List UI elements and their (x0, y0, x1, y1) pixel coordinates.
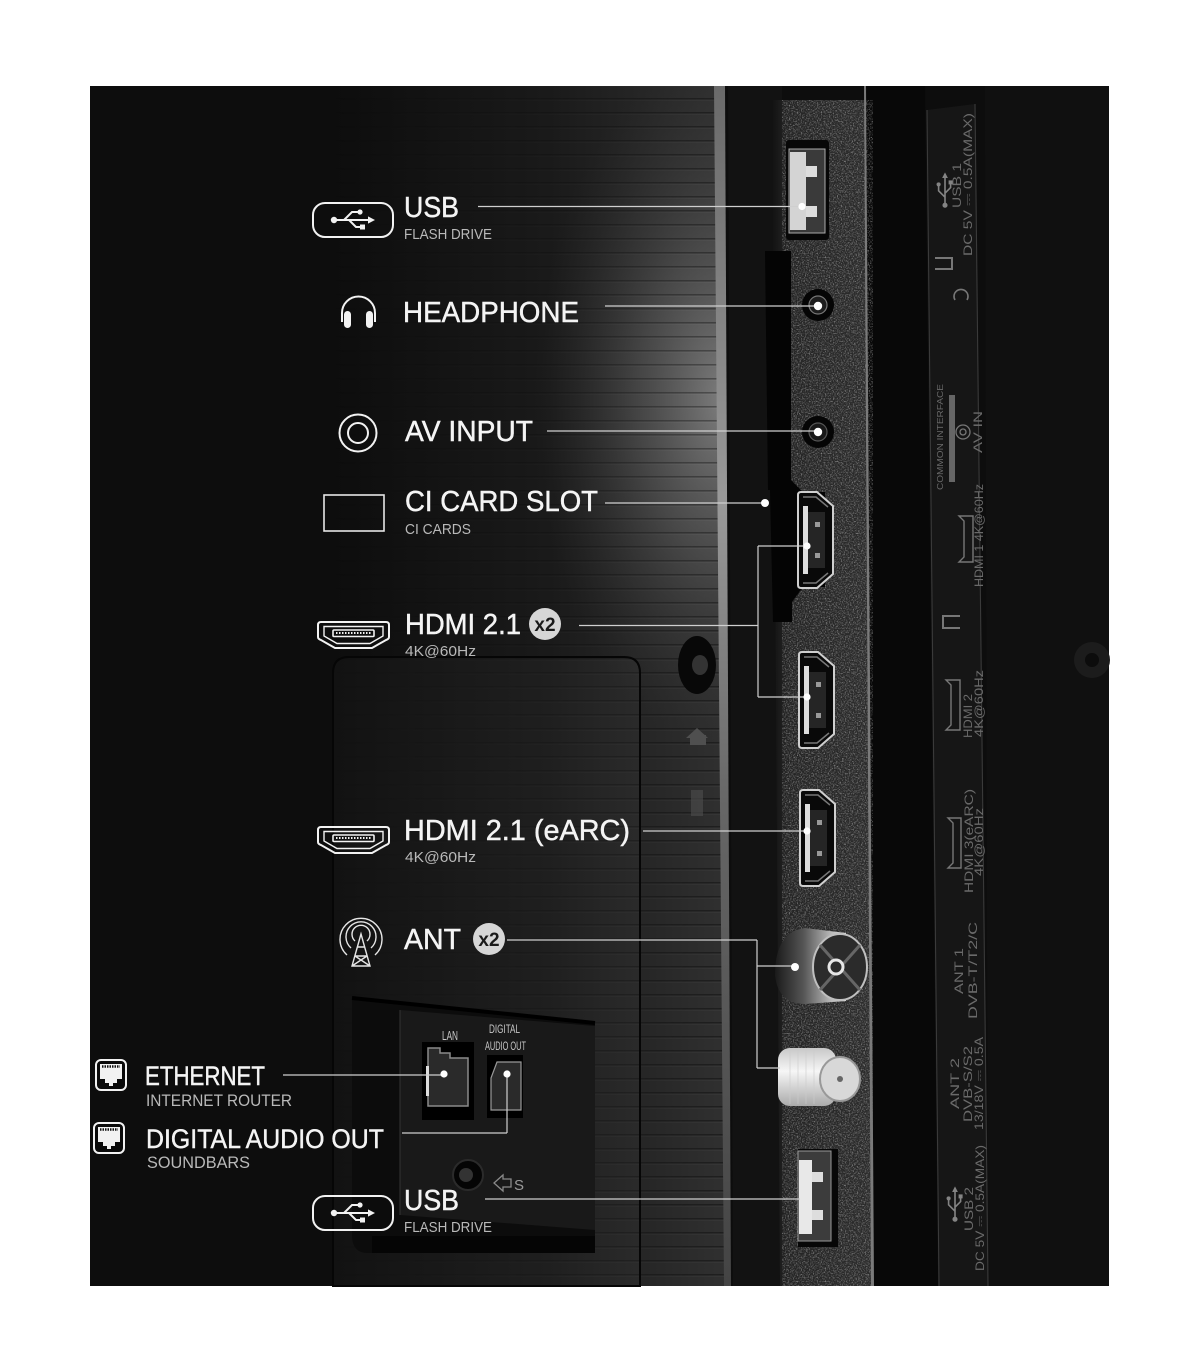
label: USB flash drive lower (313, 1185, 492, 1236)
leader lines and dots (283, 203, 822, 1199)
label: Ethernet: INTERNET ROUTER (146, 1091, 292, 1110)
LAN port (422, 1028, 474, 1120)
label: USB flash drive lower: USB (404, 1185, 459, 1217)
label: HDMI 2.1 x2 (318, 608, 561, 660)
label: HDMI 2.1 eARC (318, 815, 630, 866)
label: AV input: AV INPUT (405, 416, 533, 448)
label: Ethernet (96, 1060, 292, 1110)
label: USB flash drive: USB (404, 192, 459, 224)
printed port label strip: DC 5V ⎓ 0.5A(MAX) (961, 113, 975, 256)
label: ANT x2: ANT (404, 924, 461, 956)
label: ANT x2 (340, 918, 505, 966)
printed port label strip: HDMI 1 4K@60Hz (972, 484, 986, 587)
printed port label strip: DC 5V ⎓ 0.5A(MAX) (973, 1145, 987, 1271)
label: CI card slot: CI CARDS (405, 521, 471, 538)
label: USB flash drive (313, 192, 492, 243)
port: ANT 2 satellite (778, 1048, 860, 1106)
photo: TV rear background (90, 86, 1109, 1286)
label: HDMI 2.1 eARC: 4K@60Hz (405, 849, 476, 866)
CI card slot opening (765, 251, 825, 622)
printed port label strip: HDMI 3(eARC) (962, 789, 976, 893)
mounting screw centre (678, 636, 716, 694)
label: ANT x2: x2 (478, 930, 500, 951)
printed port label strip: 4K@60Hz (972, 670, 986, 737)
connector panel (772, 86, 874, 1286)
label: CI card slot: CI CARD SLOT (405, 486, 598, 518)
label: HDMI 2.1 x2: 4K@60Hz (405, 643, 476, 660)
label: CI card slot (324, 486, 598, 538)
printed port label strip: ANT 2 (948, 1058, 962, 1109)
digital audio out port (485, 1022, 526, 1118)
printed port label strip: HDMI 2 (961, 694, 975, 738)
port: HDMI 3 eARC (800, 790, 835, 886)
printed port label strip: COMMON INTERFACE (936, 384, 945, 490)
label: HDMI 2.1 eARC: HDMI 2.1 (eARC) (404, 815, 630, 847)
moulded arrow and US marks (686, 728, 708, 816)
port: ANT 1 coaxial (775, 928, 867, 1004)
label: digital audio out: DIGITAL AUDIO OUT (146, 1124, 384, 1154)
port: USB 2 (798, 1149, 838, 1247)
label: digital audio out: SOUNDBARS (147, 1153, 250, 1172)
port: AV jack (802, 416, 834, 448)
port: USB 1 (786, 140, 829, 240)
printed port label strip: USB 2 (962, 1187, 976, 1231)
label: HDMI 2.1 x2: x2 (534, 615, 556, 636)
right mounting screw (1074, 642, 1110, 678)
label: digital audio out (94, 1123, 384, 1172)
printed port label strip: 13/18V ⎓ 0.5A (972, 1037, 986, 1130)
inset connector bay (352, 998, 595, 1253)
printed port label strip: 4K@60Hz (972, 808, 986, 876)
screw and S mark (453, 1160, 524, 1194)
port: headphone jack (802, 289, 834, 321)
label: USB flash drive: FLASH DRIVE (404, 226, 492, 243)
digital audio out port: AUDIO OUT (485, 1039, 526, 1053)
label: AV input (340, 414, 533, 452)
label: HDMI 2.1 x2: HDMI 2.1 (405, 609, 521, 641)
rear cover panel outline (333, 657, 640, 1286)
printed port label strip (927, 104, 988, 1286)
digital audio out port: DIGITAL (489, 1022, 520, 1036)
label: Ethernet: ETHERNET (145, 1061, 265, 1091)
port: HDMI 1 (798, 492, 833, 588)
printed port label strip: DVB-S/S2 (961, 1046, 975, 1122)
printed port label strip: USB 1 (950, 163, 964, 208)
screw and S mark: S (514, 1177, 524, 1194)
LAN port: LAN (442, 1028, 458, 1043)
printed port label strip: ANT 1 (952, 948, 966, 994)
printed port label strip: DVB-T/T2/C (966, 922, 980, 1019)
port: HDMI 2 (799, 652, 834, 748)
printed port label strip: AV IN (971, 411, 985, 453)
label: USB flash drive lower: FLASH DRIVE (404, 1219, 492, 1236)
label: headphone: HEADPHONE (403, 297, 579, 329)
